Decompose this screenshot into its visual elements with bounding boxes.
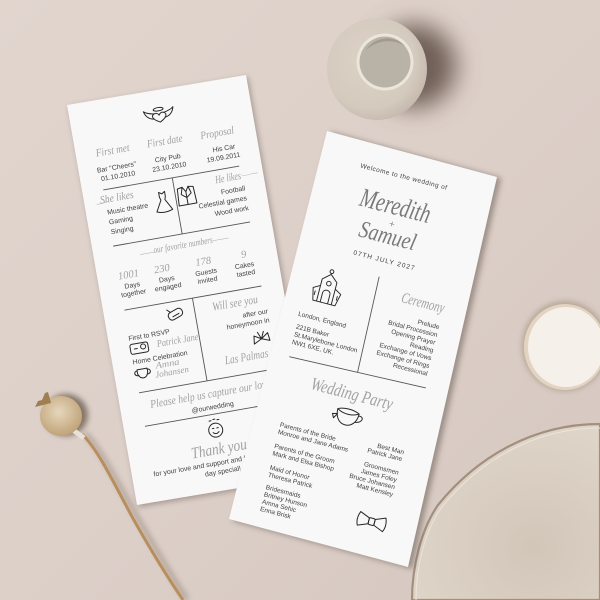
section: honeymoon: honeymoon in (226, 317, 270, 332)
section: favorite numbers (114, 228, 257, 299)
section: she likes (95, 187, 152, 238)
wedding party: left column: Monroe and Jane Adams (277, 429, 350, 454)
small dish (522, 301, 600, 391)
icon: cup (134, 368, 151, 379)
section: honeymoon: Las Palmas (223, 346, 270, 368)
venue address: St.Marylebone London (293, 331, 359, 355)
section: favorite numbers: 9 (240, 249, 248, 261)
wedding party: left column: Bridesmaids (265, 484, 302, 500)
section: proposal: His Car (212, 143, 237, 154)
card: programme (right) (229, 131, 501, 569)
venue address: London, England (297, 311, 347, 330)
section: favorite numbers: Cakes (234, 261, 255, 271)
section: ceremony: Reading (409, 342, 435, 355)
section: first date: City Pub (154, 153, 181, 165)
section: favorite numbers: Days (159, 275, 176, 285)
icon: bow tie (356, 511, 387, 532)
wedding party: left column: Maid of Honor (269, 465, 311, 482)
section: she likes: Singing (110, 225, 134, 236)
wedding party: left column: Britney Hunson (263, 491, 308, 509)
section: first to RSVP: Home Celebration (132, 350, 188, 366)
section: ceremony: Opening Prayer (390, 329, 437, 347)
section: proposal: Proposal (199, 124, 235, 142)
icon: sign tag (165, 303, 184, 321)
section: first to RSVP (128, 324, 205, 383)
section: he likes: Celestial games (198, 195, 248, 211)
section: first date: First date (145, 133, 184, 151)
section: first date: 23.10.2010 (152, 161, 187, 174)
section: ceremony: Ceremony (400, 290, 446, 317)
wedding party: right column: Patrick Jane (367, 447, 403, 463)
wedding party: left column: Enna Brisk (259, 506, 292, 521)
section: capture our love: Please help us capture our love (149, 378, 272, 411)
section: capture our love: @ourwedding (191, 401, 235, 415)
venue address: NW1 6XE, UK. (291, 339, 335, 357)
wedding party: right column: Best Man (376, 443, 405, 456)
couple names (349, 182, 434, 258)
section: first met: 01.10.2010 (101, 170, 136, 183)
wedding party: right column: Matt Kensley (356, 482, 395, 499)
card: timeline (left) (67, 75, 318, 507)
wedding date: 07TH JULY 2027 (352, 250, 416, 272)
ceramic vase (327, 18, 456, 120)
section: favorite numbers: 178 (195, 255, 213, 269)
wedding party: left column: Parents of the Bride (279, 422, 337, 443)
section: proposal: 19.09.2011 (206, 152, 241, 165)
section: capture our love (149, 378, 273, 422)
section: honeymoon: Will see you (211, 292, 259, 314)
section: ceremony: Bridal Procession (387, 320, 439, 339)
section: first to RSVP: Amna (154, 356, 181, 371)
wedding party: right column: Groomsmen (363, 461, 400, 477)
section: favorite numbers: invited (197, 276, 218, 286)
section: thank you: day special! (205, 465, 242, 479)
icon: dress (154, 191, 173, 213)
section: favorite numbers: Guests (195, 267, 218, 278)
section: ceremony: Prelude (417, 319, 441, 331)
section: favorite numbers: together (121, 288, 148, 299)
section: first met: First met (94, 142, 131, 160)
section: she likes: Music theatre (107, 202, 149, 217)
section: she likes: She likes (99, 189, 135, 207)
section: favorite numbers: engaged (154, 282, 182, 293)
wedding party: left column (257, 422, 351, 530)
section: he likes: Wood work (214, 205, 250, 218)
section: thank you: for your love and support and for making our (153, 448, 289, 478)
section: he likes: Football (221, 185, 246, 197)
section: proposal (199, 124, 241, 165)
icon: camera (130, 342, 149, 355)
section: first met: Bar "Cheers" (96, 161, 137, 175)
icon: bow ribbon (252, 330, 270, 344)
section: favorite numbers: our favorite numbers (153, 235, 214, 256)
icon: cake face (207, 418, 224, 438)
couple names: Samuel (356, 217, 419, 256)
welcome line: Welcome to the wedding of (360, 163, 448, 192)
section: honeymoon: after our (242, 308, 269, 320)
wedding party: left column: Parents of the Groom (273, 443, 335, 465)
wedding party: left column: Theresa Patrick (267, 472, 314, 490)
venue address (290, 311, 364, 362)
section: favorite numbers: 230 (153, 263, 171, 276)
section: favorite numbers: Days (124, 281, 141, 291)
section: ceremony: Exchange of Vows (379, 342, 433, 362)
section: favorite numbers: 1001 (117, 268, 140, 283)
wedding party: right column: James Foley (360, 468, 398, 484)
section: favorite numbers: tasted (236, 269, 256, 279)
section: honeymoon (211, 290, 277, 368)
section: first to RSVP: First to RSVP (128, 329, 171, 343)
section: ceremony: Exchange of Rings (376, 350, 431, 370)
couple names: Meredith (356, 182, 434, 229)
dried poppy (35, 392, 187, 600)
section: first met (93, 141, 139, 184)
section: he likes: He likes (214, 170, 242, 186)
section: first to RSVP: Patrick Jane (155, 332, 200, 350)
wedding party: right column (347, 438, 405, 499)
icon: teacup (330, 405, 364, 429)
icon: winged heart (143, 105, 175, 125)
wedding party: left column: Amna Sehic (261, 499, 298, 514)
icon: church (310, 266, 346, 307)
couple names: + (387, 218, 396, 231)
section: thank you (150, 429, 290, 487)
wedding party: left column: Mark and Elsa Bishop (272, 450, 335, 473)
icon: suit jacket (176, 185, 197, 206)
ceramic plate (412, 424, 600, 600)
venue address: 221B Baker (295, 324, 331, 339)
section: thank you: Thank you (190, 436, 248, 463)
section: she likes: Gaming (109, 215, 134, 226)
section: first date (145, 133, 188, 174)
section: ceremony: Recessional (392, 362, 429, 378)
section: first to RSVP: Johansen (154, 364, 190, 380)
wedding party: right column: Bruce Johansen (348, 473, 396, 491)
section: he likes (194, 167, 264, 220)
heading: wedding party: Wedding Party (309, 373, 395, 414)
section: ceremony (374, 288, 447, 378)
